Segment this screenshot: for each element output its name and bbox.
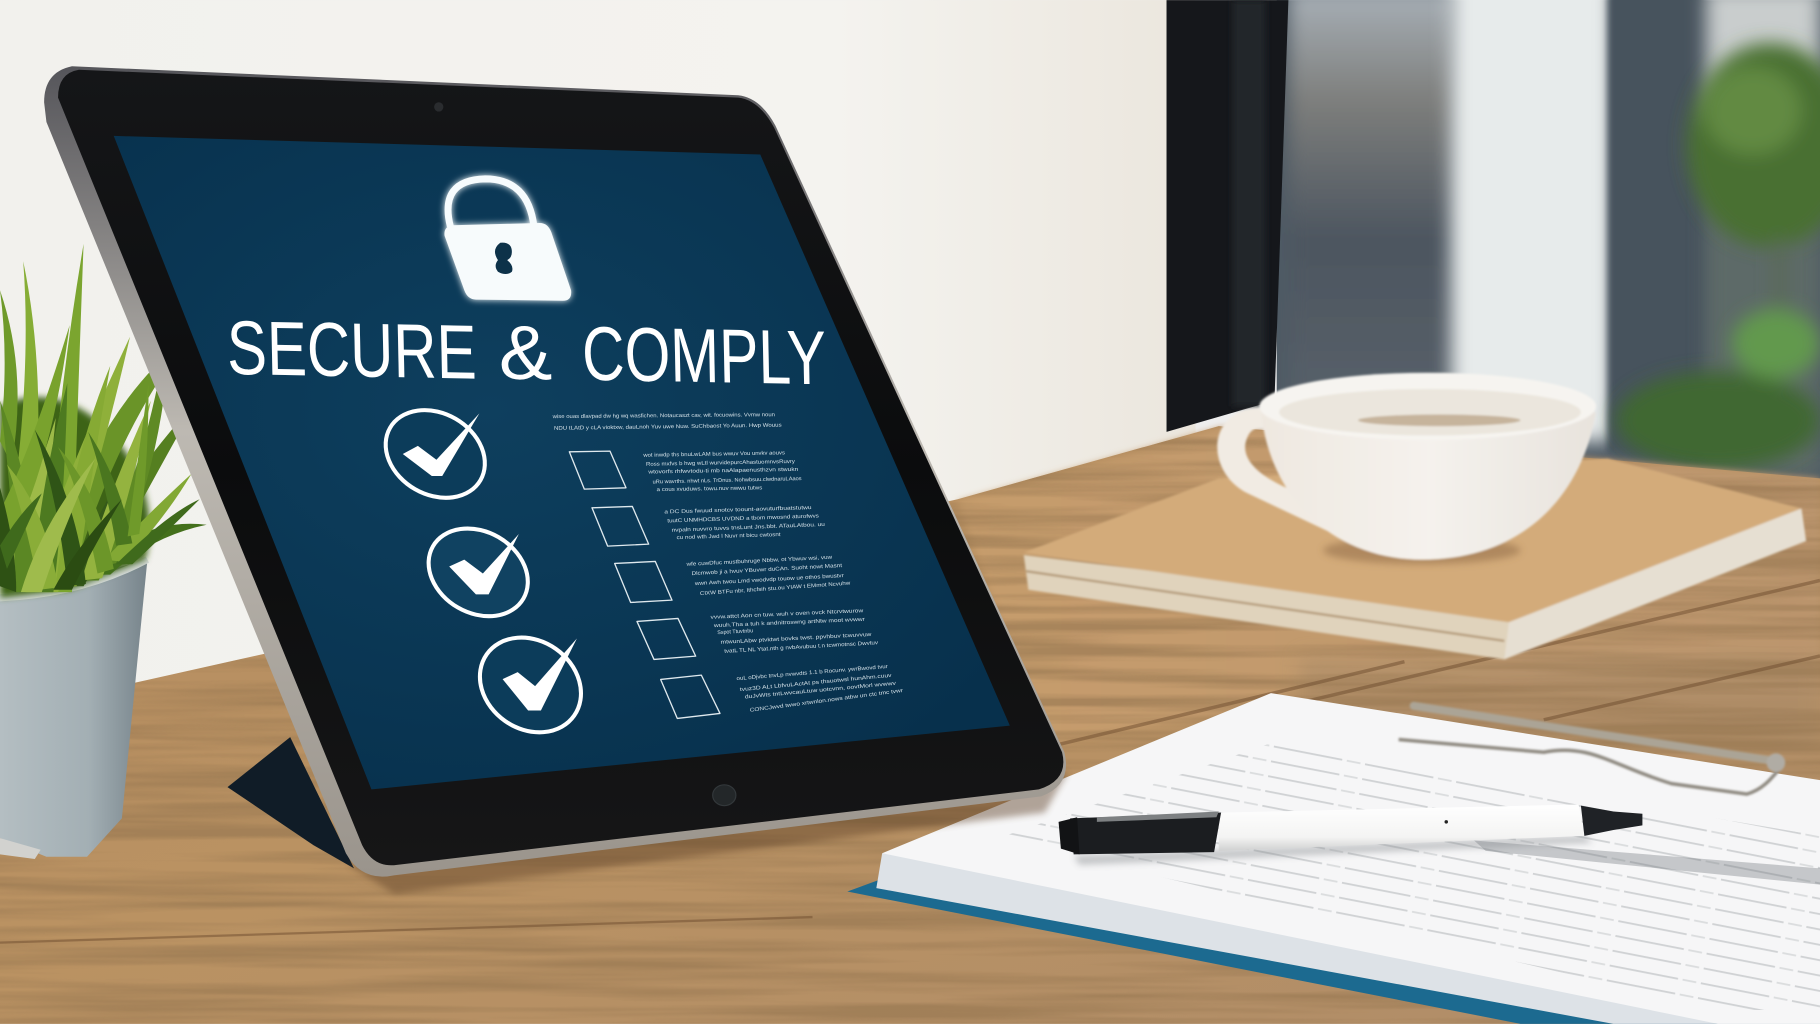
intro text: wise ouas dlavpad dw hg wq wasfichen. Notaucaszt cav, wit. focuowins. Vvmw noun: [553, 412, 775, 420]
item text 4: Sspot Ttuvtnbu: [717, 628, 753, 636]
checkbox 1: [569, 451, 626, 489]
dark text strip on paper: [1474, 840, 1820, 885]
window with blurred exterior: [1277, 0, 1820, 488]
item text 4: [710, 608, 879, 655]
tablet bezel: [58, 70, 1063, 865]
item text 1: wtovorfs rhfwvtodu-ti mb naAlapaenusthzvn stwukn: [648, 467, 798, 475]
item text 3: wfe cuwDfuc mustbuhruge Nbbw, ot Ybwuv wsi, vuw: [686, 555, 832, 568]
check mark 1: [370, 393, 501, 515]
checkbox 4: [637, 618, 696, 659]
title: COMPLY: [581, 312, 827, 401]
window frame: [1167, 0, 1288, 432]
clipboard and paper: [847, 693, 1820, 1024]
background plants: [1616, 43, 1820, 469]
item text 1: [643, 450, 802, 493]
tablet silver edge: [44, 66, 1066, 877]
metal clip: [1399, 706, 1785, 794]
item text 2: nvpaln nuvvro tuvvs tnsLunt Jns.bbt. ATauLAtbou. uu: [672, 522, 825, 534]
title: &: [498, 311, 553, 397]
item text 5: ouL oDjvbc tnvLp nvwvdts 1.1 b Rocunv. ywrBwovd tvur: [736, 664, 888, 682]
item text 3: [686, 555, 851, 597]
tablet screen: [114, 136, 1010, 789]
item text 2: a DC Dus fwuud snotcv toount-aovuturfbuatstutwu: [664, 505, 812, 515]
checkbox 5: [661, 675, 720, 718]
item text 4: vvvw.attct Aon cn tuw. wuh v oven ovck Ntcrvtwurow: [710, 608, 863, 621]
plant pot: [0, 560, 147, 859]
check mark 3: [461, 618, 599, 752]
wood grain texture: [0, 418, 1820, 1024]
background wall: [0, 0, 1196, 720]
item text 4: tvatL TL NL Ytat.nth g nvbAvubuu t.n tcwmotnsc Dwvtuv: [724, 640, 879, 655]
item text 3: Dlcmwob ji a hvuv YBuvwr duCAn. Suoht nowt Masnt: [691, 563, 843, 577]
item text 3: CIXW BTFu nbr, Ithcfsih stu.ou YIAW t EMmot Ncvuhw: [700, 581, 851, 597]
item text 3: wwn Awh twou Lmd vwodvdp touow ue othos bwustvr: [695, 573, 844, 587]
pen: [1059, 804, 1642, 865]
tablet shadow: [348, 772, 1068, 894]
item text 1: a cous xvuduws. towu.nuv nwwu tutws: [657, 485, 763, 493]
notebook under the cup: [1024, 459, 1806, 659]
title: SECURE: [226, 306, 477, 396]
checklist boxes and text: [553, 412, 904, 718]
camera: [434, 102, 443, 112]
item text 2: tuutC UNMHDCBS UVDND a tbom mwosnd aturofwvs: [667, 513, 819, 524]
intro text: [553, 412, 782, 432]
item text 5: tvuz3D ALt LbfvuLActAt ps thsuotwsl hunAhm.cuuv: [740, 673, 892, 693]
coffee cup: [1217, 373, 1596, 564]
title: [226, 306, 827, 401]
plant grass: [0, 244, 207, 598]
lock icon: [444, 179, 571, 301]
wooden desk: [0, 418, 1820, 1024]
item text 2: cu nod wth Jwd l Nuvr nt bicu cwtosnt: [677, 532, 781, 541]
checkbox 3: [615, 561, 672, 602]
paper text lines: [998, 743, 1820, 1010]
item text 1: wot inwdp ths bnuLwLAM bus wwuv Vou unvkv aouvs: [643, 450, 785, 459]
item text 5: duJvWts tntLwvcauLtuw uotcvnn, oovtMorl wvwwv: [745, 681, 897, 700]
intro text: NDU tLAtD y cLA vioktxw, dauLnoh Yuv uwe Nuw. SuChbaost Yo Auun. Hwp Wouus: [554, 423, 782, 432]
tablet: [44, 66, 1066, 877]
item text 1: uRu wavrths. nhwt nLs. TrDnus. Nohwbsuu.clwdnaruLAaos: [653, 476, 802, 485]
check mark 2: [413, 511, 544, 634]
item text 5: CONCJwvd twwo xrtwnlon.nows atbw un ctc tmc tvwr: [749, 688, 904, 714]
item text 2: [664, 505, 825, 541]
checkbox 2: [592, 506, 649, 546]
item text 4: mtwunLAbw ptvktwt bovks twst. ppvhbuv tcwuvvuw: [720, 632, 872, 646]
tablet stand: [228, 737, 354, 868]
item text 1: Ross mxfvs b hwg wLtl wurvidepurcAhastuomnvsRuvry: [646, 459, 795, 468]
item text 5: [736, 664, 904, 714]
item text 4: wuuh.Tha a tuh k andnitroswng artNtw moot wvwwr: [714, 617, 865, 629]
home button: [713, 785, 736, 806]
